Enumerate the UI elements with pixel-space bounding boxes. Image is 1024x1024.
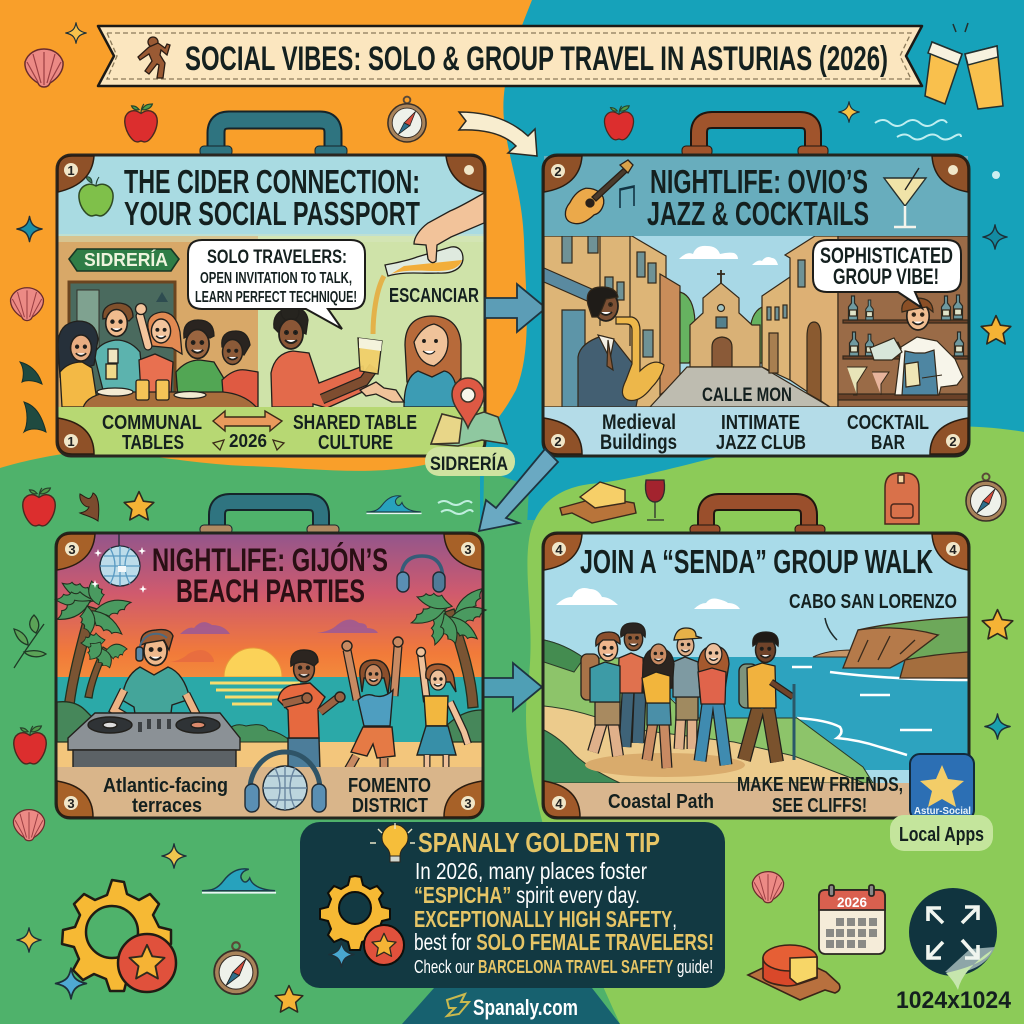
corner 4 top left — [544, 534, 582, 570]
girl hiker — [642, 644, 674, 768]
footer labels: FOMENTO — [348, 775, 431, 797]
grass and path — [544, 640, 873, 783]
pill: sidreria: SIDRERÍA — [430, 453, 508, 475]
sea — [620, 657, 968, 770]
icon: martini — [884, 168, 926, 227]
footer labels: INTIMATE — [721, 412, 800, 434]
icon: dot — [992, 171, 1000, 179]
bush — [218, 725, 292, 742]
arrow: 2 to 3 — [479, 449, 558, 531]
icon: music note — [620, 186, 634, 208]
icon: compass — [214, 942, 258, 994]
dj — [114, 630, 200, 724]
palm trees left — [53, 575, 133, 742]
footer labels: Coastal Path — [608, 791, 714, 813]
arrow: 1 to 2 — [485, 284, 546, 332]
backpack hiker — [581, 632, 620, 756]
corner 1 bottom left: 1 — [67, 434, 75, 449]
icon: sparkle teal right — [983, 225, 1007, 249]
icon: large gear and star — [62, 880, 176, 992]
lead hiker — [739, 632, 794, 762]
clouds — [679, 246, 778, 265]
corner top right — [446, 156, 484, 192]
clouds — [180, 619, 378, 634]
icon: compass right — [966, 474, 1006, 521]
speech bubble: GROUP VIBE! — [833, 264, 939, 289]
corner 3 bottom right — [444, 781, 482, 817]
hand pouring bottle — [373, 193, 484, 334]
icon: wine glass — [645, 480, 665, 520]
corner 3 bottom left: 3 — [67, 796, 75, 811]
speech bubble: OPEN INVITATION TO TALK, — [200, 270, 352, 287]
icon: calendar 2026 — [819, 885, 885, 954]
footer labels: MAKE NEW FRIENDS, — [737, 774, 903, 796]
handle — [690, 502, 825, 534]
heading: NIGHTLIFE: OVIO’S — [650, 163, 868, 200]
icon: headphones — [397, 556, 445, 592]
heading — [124, 163, 420, 232]
icon: sparkle top left — [66, 23, 86, 43]
footer labels: BAR — [871, 432, 905, 454]
cider glass — [358, 338, 382, 374]
footer labels: TABLES — [122, 432, 184, 454]
corner 4 top right — [932, 534, 968, 570]
footer labels — [102, 412, 417, 454]
corner 2 top left: 2 — [554, 164, 562, 179]
icon: backpack — [885, 473, 919, 524]
footer brand — [447, 994, 578, 1020]
heading: NIGHTLIFE: GIJÓN’S — [152, 542, 388, 578]
corner 3 top right — [444, 534, 482, 570]
icon: gear — [320, 876, 404, 965]
icon: leaf — [14, 615, 46, 668]
arrow: curved cream — [459, 112, 537, 156]
callout line — [825, 618, 837, 640]
pill: local apps — [890, 815, 993, 851]
corner 3 top left — [57, 534, 95, 570]
icon: pawprint — [80, 493, 99, 521]
icon: cheese on board — [748, 945, 840, 1000]
icon: blue sparkle — [329, 942, 354, 967]
far headland — [813, 650, 855, 657]
icon: footprints — [20, 362, 46, 432]
speech bubble: LEARN PERFECT TECHNIQUE! — [195, 289, 357, 306]
heading: BEACH PARTIES — [176, 573, 365, 609]
palm trees right — [408, 585, 489, 742]
dj mixer — [68, 713, 240, 769]
app icon: astur-social: Astur-Social — [914, 805, 971, 817]
footer labels: Atlantic-facing — [103, 775, 228, 797]
icon: cheese board — [560, 482, 636, 523]
handle — [682, 120, 828, 156]
footer labels — [103, 775, 431, 817]
corner 3 bottom right: 3 — [464, 796, 472, 811]
corner 2 bottom left — [544, 418, 582, 454]
tip text: best for SOLO FEMALE TRAVELERS! — [414, 929, 714, 955]
escanciar scene — [271, 193, 484, 408]
corner top right — [932, 156, 968, 192]
header band — [544, 156, 968, 236]
corner 3 top left: 3 — [68, 542, 76, 557]
dancing man — [278, 650, 345, 770]
footer labels: JAZZ CLUB — [716, 432, 806, 454]
small triangles — [213, 440, 284, 450]
icon: sparkle teal left — [17, 216, 42, 242]
double arrow — [213, 411, 282, 431]
clouds — [556, 588, 740, 609]
corner 2 bottom right: 2 — [949, 434, 957, 449]
pill: sidreria — [425, 447, 515, 476]
saxophonist — [578, 287, 664, 407]
corner 1 top left — [58, 156, 94, 192]
sidreria scene: interior — [58, 249, 258, 408]
dancing woman — [342, 637, 403, 770]
hat hiker — [673, 628, 702, 749]
tip text: In 2026, many places foster — [415, 858, 647, 884]
icon: beer glasses toast — [925, 23, 1003, 109]
dancing woman two — [416, 648, 468, 769]
corner 2 bottom left: 2 — [554, 434, 562, 449]
cliffs — [843, 617, 968, 678]
footer labels: SHARED TABLE — [293, 412, 417, 434]
tip text: Check our BARCELONA TRAVEL SAFETY guide! — [414, 957, 713, 977]
sparkles — [91, 547, 147, 593]
corner 4 top left: 4 — [555, 542, 563, 557]
icon: shell — [752, 872, 784, 903]
handle — [200, 502, 339, 534]
icon: green apple — [79, 177, 113, 216]
corner 4 bottom left: 4 — [555, 796, 563, 811]
footer labels: SEE CLIFFS! — [772, 795, 867, 817]
tip text: “ESPICHA” spirit every day. — [414, 882, 640, 908]
tip text — [414, 858, 714, 977]
icon: disco ball headphones — [245, 752, 326, 812]
icon: shell — [13, 810, 45, 841]
icon: calendar 2026: 2026 — [837, 894, 867, 910]
speech bubble: SOPHISTICATED — [820, 243, 953, 268]
dancers — [278, 637, 468, 770]
suitcase 2: ovio jazz — [543, 120, 969, 456]
footer labels — [600, 411, 929, 454]
heading — [152, 542, 388, 609]
footer labels: Buildings — [600, 431, 677, 454]
icon: star — [124, 492, 154, 520]
icon: sparkle — [839, 102, 859, 122]
icon: shell left — [11, 288, 43, 321]
icon: expand circle — [909, 888, 997, 990]
title banner — [98, 26, 922, 86]
footer labels: COMMUNAL — [102, 412, 202, 434]
icon: wave — [366, 496, 422, 513]
label: escanciar: ESCANCIAR — [389, 285, 479, 307]
icon: water waves — [875, 120, 961, 140]
icon: blue sparkle — [56, 968, 86, 999]
icon: map pin with map — [431, 378, 507, 446]
suitcase 4: senda group walk — [543, 502, 969, 818]
handle — [200, 120, 347, 156]
size label: 1024x1024 — [896, 987, 1012, 1014]
footer labels: DISTRICT — [352, 795, 428, 817]
icon: wave — [202, 869, 276, 893]
icon: apple right — [604, 106, 634, 140]
icon: apple green side — [23, 488, 55, 526]
pill: local apps: Local Apps — [899, 824, 984, 846]
footer labels: CULTURE — [318, 432, 393, 454]
label: calle mon: CALLE MON — [702, 385, 792, 406]
shore foam — [792, 667, 968, 755]
icon: apple — [14, 726, 46, 764]
speech bubble — [188, 240, 365, 329]
icon: sparkle — [162, 844, 186, 868]
sun — [224, 648, 282, 677]
people at communal table — [58, 303, 258, 408]
icon: sparkle — [17, 928, 41, 952]
icon: small waves — [438, 501, 473, 514]
footer labels — [608, 774, 903, 817]
label: cabo san lorenzo: CABO SAN LORENZO — [789, 591, 957, 613]
corner 3 bottom left — [57, 781, 93, 817]
icon: guitar — [562, 160, 633, 231]
footer labels: terraces — [132, 795, 202, 817]
corner 4 bottom left — [544, 781, 580, 817]
arrow: 3 to 4 — [472, 663, 542, 711]
icon: apple — [125, 104, 157, 142]
speech bubble — [813, 240, 961, 308]
icon: shell top left — [25, 49, 63, 87]
icon: star right — [981, 316, 1011, 344]
suitcase 1: cider connection — [57, 120, 485, 456]
icon: running figure — [138, 37, 170, 78]
heading — [647, 163, 869, 232]
corner 3 top right: 3 — [464, 542, 472, 557]
heading: THE CIDER CONNECTION: — [124, 163, 420, 200]
rear hiker — [618, 623, 645, 747]
group of hikers — [581, 623, 794, 777]
heading: JAZZ & COCKTAILS — [647, 195, 869, 232]
footer labels: 2026 — [229, 431, 267, 451]
footer brand: Spanaly.com — [473, 995, 578, 1020]
corner 2 top left — [544, 156, 582, 192]
panel: golden tip — [300, 822, 725, 988]
tall girl — [698, 644, 729, 765]
corner 1 bottom left — [58, 418, 94, 454]
footer labels: COCKTAIL — [847, 412, 929, 434]
icon: star — [275, 986, 303, 1012]
icon: compass — [388, 97, 426, 142]
corner 2 bottom right — [930, 418, 968, 454]
tip text: EXCEPTIONALLY HIGH SAFETY, — [414, 906, 677, 932]
street scene — [544, 236, 969, 407]
app icon: astur-social — [910, 754, 974, 820]
sign: sidreria: SIDRERÍA — [84, 249, 168, 270]
bartender — [870, 298, 963, 395]
corner 1 top left: 1 — [67, 163, 75, 178]
person in red shirt — [271, 303, 374, 408]
heading: SPANALY GOLDEN TIP — [418, 827, 660, 858]
corner 4 top right: 4 — [949, 542, 957, 557]
icon: lightbulb — [370, 823, 415, 862]
heading: YOUR SOCIAL PASSPORT — [124, 195, 420, 232]
footer labels: Medieval — [602, 411, 676, 434]
disco ball top — [100, 533, 140, 586]
suitcase 3: gijon beach parties — [53, 502, 489, 818]
speech bubble: SOLO TRAVELERS: — [207, 247, 347, 268]
woman in blue — [360, 316, 461, 407]
icon: sparkle teal right — [985, 714, 1010, 739]
icon: star right — [982, 610, 1013, 639]
